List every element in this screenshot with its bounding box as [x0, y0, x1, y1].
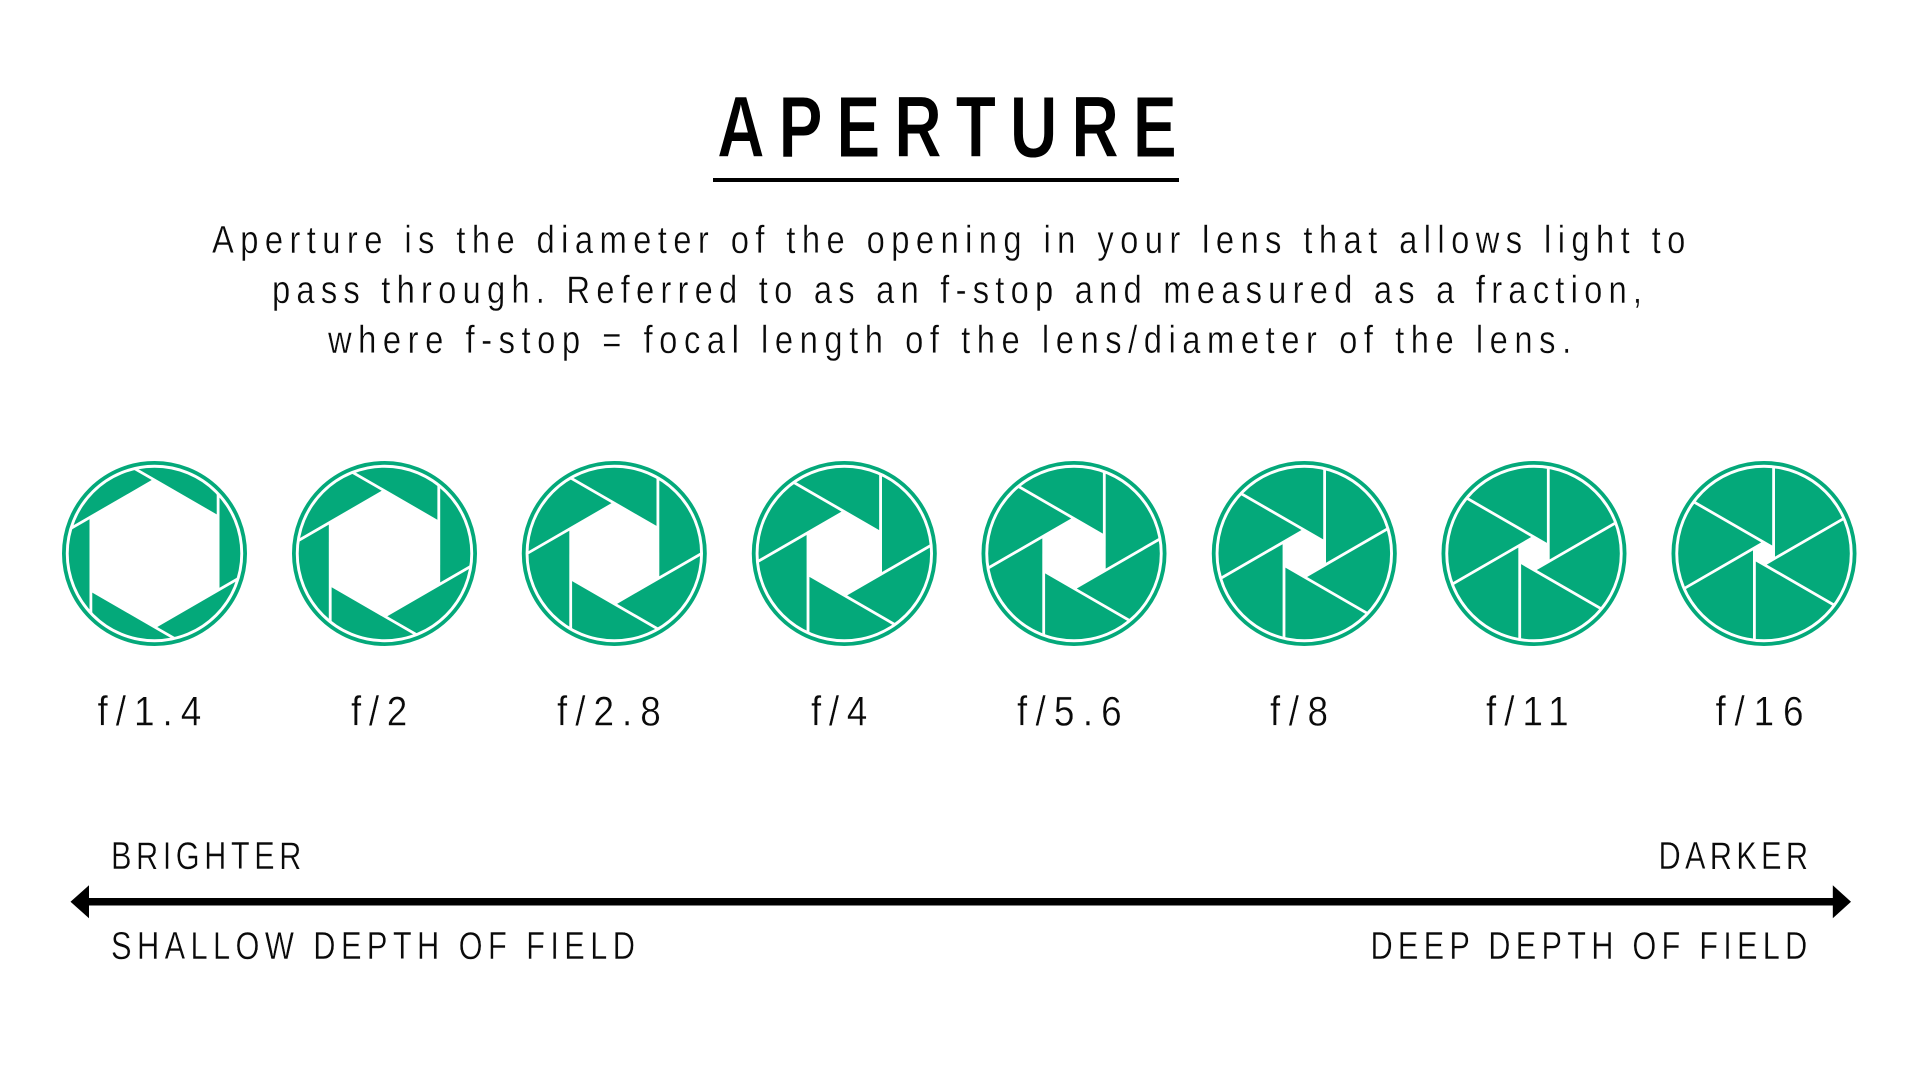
label: f/1.4: f/1.4	[98, 688, 201, 735]
label: brighter: BRIGHTER	[111, 835, 301, 878]
icon: aperture f/16	[1672, 461, 1856, 646]
label: f/4: f/4	[811, 688, 867, 735]
icon: aperture f/2.8	[522, 461, 707, 646]
description text: where f-stop = focal length of the lens/diameter of the lens.	[327, 317, 1571, 362]
label: f/2: f/2	[351, 688, 407, 735]
label: f/2.8: f/2.8	[557, 688, 661, 735]
icon: aperture f/8	[1212, 461, 1397, 646]
label: darker: DARKER	[1658, 835, 1808, 878]
label: deep depth of field: DEEP DEPTH OF FIELD	[1370, 925, 1807, 968]
label: shallow depth of field: SHALLOW DEPTH OF FIELD	[111, 925, 635, 968]
description text: pass through. Referred to as an f-stop and measured as a fraction,	[272, 267, 1642, 312]
title underline	[713, 178, 1179, 182]
icon: aperture f/2	[292, 461, 477, 646]
label: f/11: f/11	[1486, 688, 1569, 735]
label: f/8: f/8	[1270, 688, 1328, 735]
description text: Aperture is the diameter of the opening in your lens that allows light to	[212, 217, 1685, 262]
icon: aperture f/11	[1442, 461, 1626, 646]
icon: aperture f/1.4	[62, 461, 247, 646]
label: f/16: f/16	[1716, 688, 1803, 735]
title: APERTURE	[717, 79, 1177, 176]
arrow: double-headed scale	[70, 885, 1851, 918]
icon: aperture f/5.6	[982, 461, 1166, 646]
icon: aperture f/4	[752, 461, 937, 646]
label: f/5.6: f/5.6	[1017, 688, 1122, 735]
description text	[212, 217, 1685, 362]
